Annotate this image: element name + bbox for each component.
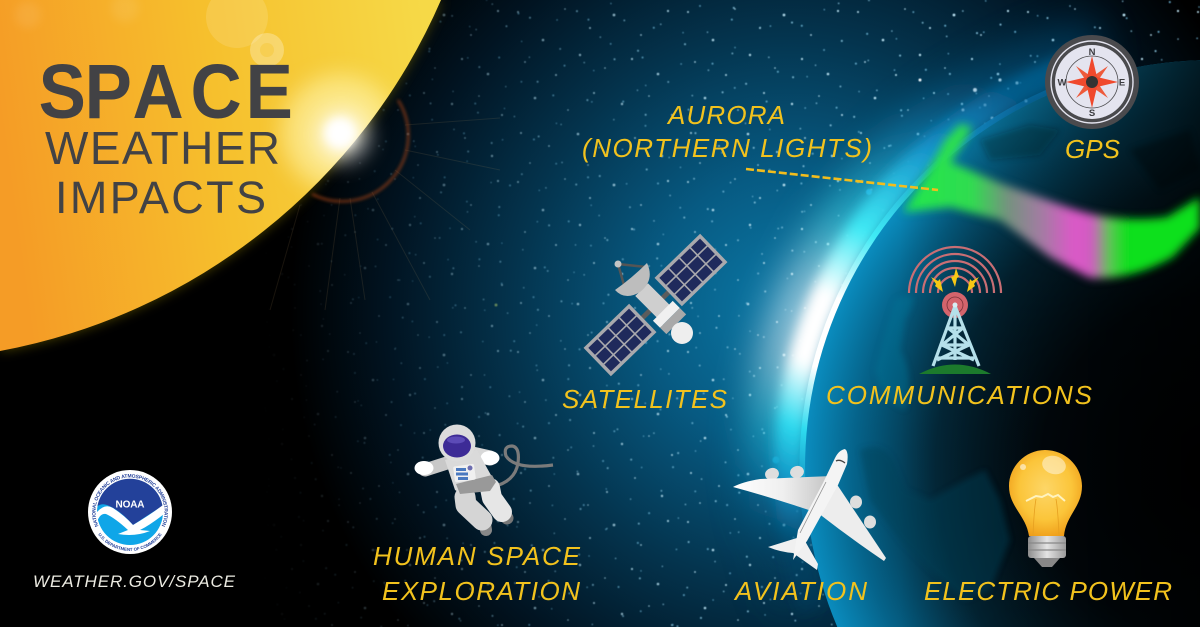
url text: WEATHER.GOV/SPACE [33,572,236,591]
atmosphere glow [773,43,1100,610]
icon: compass: N [1089,47,1096,58]
label: aurora: AURORA [666,100,785,130]
chest pack [453,464,476,482]
title [39,48,293,223]
background: space [282,0,1200,627]
icon: compass [1045,35,1139,129]
sun [0,0,500,351]
icon: compass: E [1119,78,1125,88]
label: human space exploration: EXPLORATION [382,576,580,606]
logo: NOAA: NOAA [116,500,144,510]
label: electric power: ELECTRIC POWER [924,576,1172,606]
logo: NOAA: U.S. DEPARTMENT OF COMMERCE [98,532,162,551]
icon: satellite [586,236,725,374]
icon: light bulb [1009,450,1082,567]
lower solar panel [586,306,654,374]
boots [484,518,486,530]
logo: NOAA [88,470,172,554]
upper solar panel [657,236,725,304]
body [632,280,686,334]
helmet [438,424,476,462]
tether [492,446,553,487]
icon: airplane [733,449,886,570]
label: aurora: (NORTHERN LIGHTS) [582,133,872,163]
engines [764,464,876,528]
tail [768,537,818,570]
wings [733,476,832,512]
label: satellites: SATELLITES [562,384,728,414]
torso [445,450,495,493]
logo: NOAA: NATIONAL OCEANIC AND ATMOSPHERIC ADMINISTRATION [92,474,168,527]
antenna ball [671,322,693,344]
icon: compass: S [1089,108,1095,119]
legs [465,497,482,520]
icon: compass: W [1058,78,1067,88]
arms [425,462,450,470]
earth [773,43,1200,627]
label: GPS: GPS [1065,134,1121,164]
fuselage [793,449,848,560]
label: aurora [582,100,872,163]
seagull [97,505,165,535]
lens flare [15,0,500,310]
label: human space exploration: HUMAN SPACE [373,541,581,571]
arrow: aurora leader line [746,169,938,190]
connecting boom [625,275,686,335]
star field [282,0,1200,627]
earth disc [805,60,1200,627]
title: WEATHER [45,122,280,174]
icon: astronaut [414,424,553,530]
label: aviation: AVIATION [733,576,867,606]
aurora [903,124,1200,278]
continents [860,125,1200,600]
dish [618,264,646,285]
label: communications: COMMUNICATIONS [826,380,1093,410]
icon: communications tower [909,247,1001,374]
title: IMPACTS [55,172,266,223]
label: human space exploration [373,541,581,606]
title: SPACE [39,48,293,135]
